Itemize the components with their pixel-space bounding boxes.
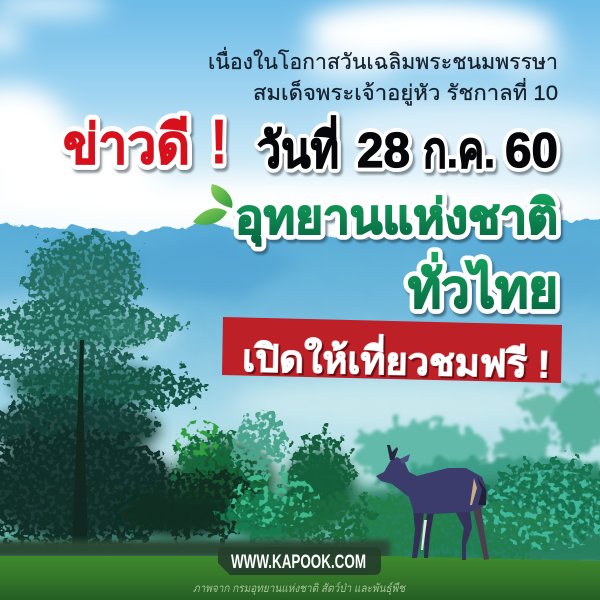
headline: good news: ข่าวดี (63, 115, 190, 175)
intro text: เนื่องในโอกาสวันเฉลิมพระชนมพรรษา (208, 47, 558, 74)
icon: sambar deer (376, 445, 489, 560)
headline: date: วันที่ (257, 115, 339, 178)
headline: national parks: อุทยานแห่งชาติ (235, 190, 558, 246)
headline: good news: ข่าวดี (63, 115, 190, 175)
background: clouds (0, 0, 600, 229)
website badge: WWW.KAPOOK.COM (231, 552, 366, 573)
headline: national parks: อุทยานแห่งชาติ (235, 190, 558, 246)
background: misty mountains (0, 218, 600, 560)
icon: green leaves (193, 184, 232, 225)
headline: good news: ! (211, 108, 227, 177)
headline: date: 60 (505, 124, 558, 178)
background: undergrowth strip (0, 540, 390, 558)
photo credit: ภาพจาก กรมอุทยานแห่งชาติ สัตว์ป่า และพันธุ์พืช (193, 581, 406, 595)
headline: date: ก.ค. (423, 124, 495, 178)
headline: date (257, 115, 558, 178)
headline: date: 60 (505, 124, 558, 178)
headline: date: วันที่ (257, 115, 339, 178)
headline: date: ก.ค. (423, 124, 495, 178)
background: large tree (0, 236, 205, 547)
background: bushes center (120, 415, 370, 544)
background: distant misty trees right (350, 382, 600, 570)
intro text: สมเด็จพระเจ้าอยู่หัว รัชกาลที่ 10 (253, 78, 558, 106)
headline: good news: ! (211, 108, 227, 177)
background: sky (0, 0, 600, 240)
background: right bushes (330, 462, 600, 558)
background: grass field (0, 556, 600, 600)
banner: free entry (222, 317, 562, 386)
headline: date: 28 (357, 124, 410, 178)
website badge (218, 547, 381, 575)
headline: nationwide: ทั่วไทย (408, 253, 558, 319)
banner: free entry: เปิดให้เที่ยวชมฟรี ! (242, 331, 551, 386)
headline: date: 28 (357, 124, 410, 178)
headline: nationwide: ทั่วไทย (408, 253, 558, 319)
intro text (208, 47, 558, 106)
